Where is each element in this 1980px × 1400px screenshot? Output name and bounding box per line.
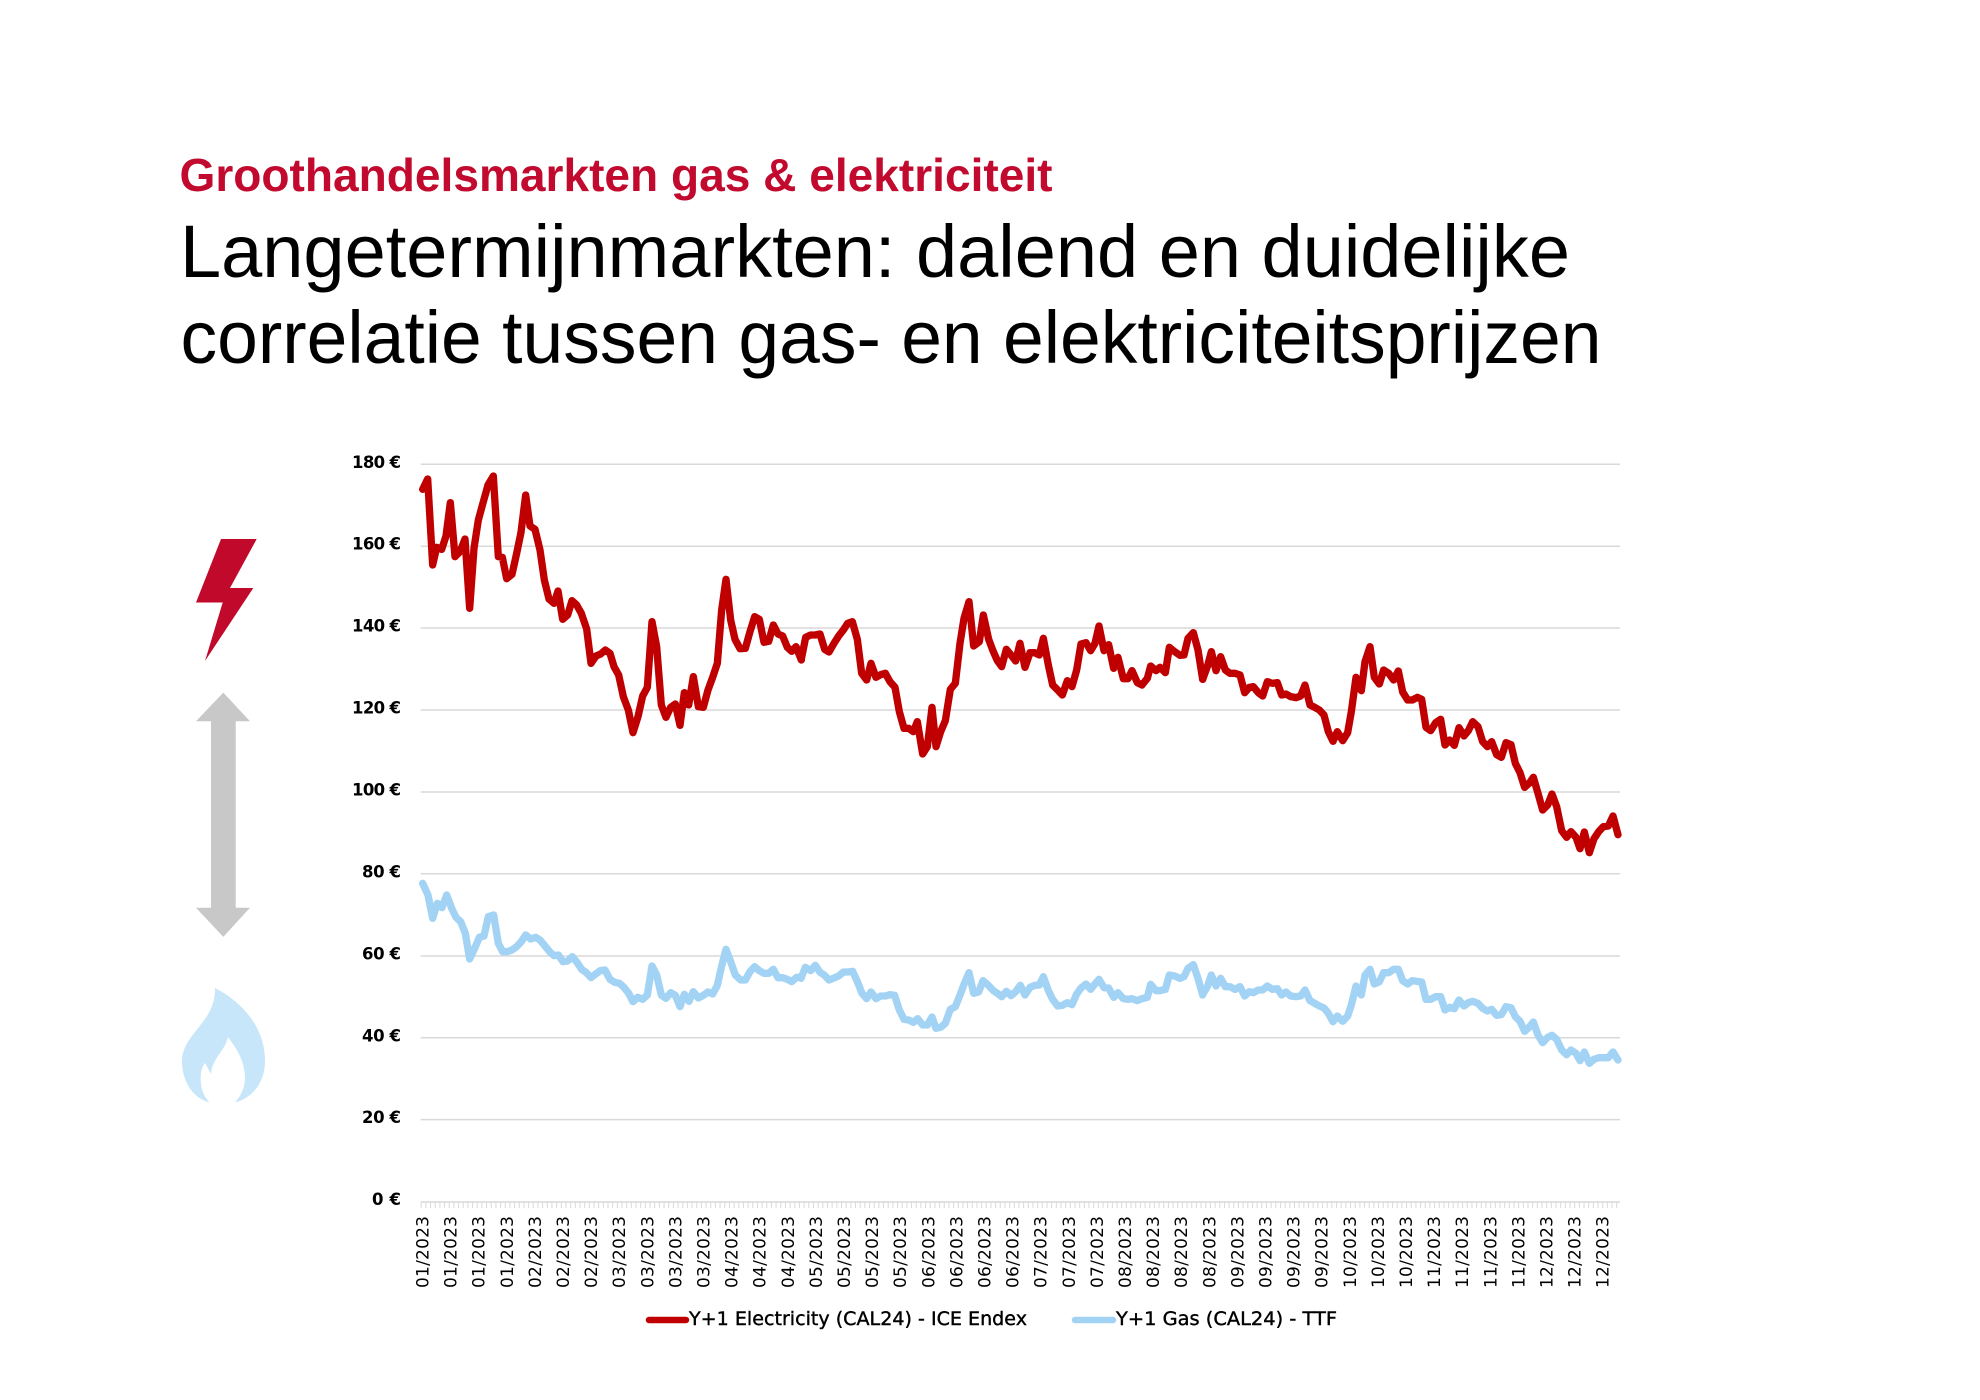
x axis date labels: 03/2023 — [610, 1216, 630, 1288]
x axis date labels: 07/2023 — [1060, 1216, 1080, 1288]
legend: gas: Y+1 Gas (CAL24) - TTF — [1115, 1308, 1337, 1330]
gridlines — [421, 464, 1620, 1205]
x axis date labels: 12/2023 — [1538, 1216, 1558, 1288]
x axis date labels: 09/2023 — [1285, 1216, 1305, 1288]
x axis date labels: 03/2023 — [638, 1216, 658, 1288]
x axis date labels: 04/2023 — [751, 1216, 771, 1288]
y axis labels: 160 € — [352, 534, 401, 554]
x axis date labels: 04/2023 — [779, 1216, 799, 1288]
title block — [180, 149, 1602, 379]
y axis labels: 100 € — [352, 780, 401, 800]
x axis date labels: 02/2023 — [526, 1216, 546, 1288]
legend — [649, 1308, 1337, 1330]
x axis date labels: 12/2023 — [1594, 1216, 1614, 1288]
x axis date labels: 11/2023 — [1481, 1216, 1501, 1288]
gas price line — [423, 883, 1618, 1063]
x axis date labels: 08/2023 — [1116, 1216, 1136, 1288]
x axis date labels: 04/2023 — [723, 1216, 743, 1288]
y axis labels: 40 € — [362, 1026, 401, 1046]
x axis date labels: 12/2023 — [1566, 1216, 1586, 1288]
main title — [180, 210, 1602, 379]
x axis date labels: 03/2023 — [694, 1216, 714, 1288]
y axis labels: 20 € — [362, 1108, 401, 1127]
x axis date labels — [414, 1216, 1614, 1288]
section heading: Groothandelsmarkten gas & elektriciteit — [180, 149, 1052, 201]
y axis labels: 80 € — [362, 862, 401, 882]
x axis date labels: 01/2023 — [498, 1216, 518, 1288]
icon: double-headed arrow — [196, 693, 250, 937]
y axis labels: 120 € — [352, 698, 401, 718]
x axis date labels: 10/2023 — [1397, 1216, 1417, 1288]
x axis date labels: 07/2023 — [1088, 1216, 1108, 1288]
x axis date labels: 06/2023 — [947, 1216, 967, 1288]
legend: electricity: Y+1 Electricity (CAL24) - ICE Endex — [688, 1308, 1027, 1330]
icon: gas flame — [182, 988, 265, 1102]
x axis date labels: 06/2023 — [919, 1216, 939, 1288]
x axis date labels: 05/2023 — [863, 1216, 883, 1288]
y axis labels: 180 € — [352, 453, 401, 472]
x axis date labels: 10/2023 — [1369, 1216, 1389, 1288]
x axis date labels: 11/2023 — [1425, 1216, 1445, 1288]
line chart — [352, 453, 1620, 1330]
electricity price line — [423, 476, 1618, 853]
x axis date labels: 02/2023 — [582, 1216, 602, 1288]
x axis date labels: 08/2023 — [1200, 1216, 1220, 1288]
x axis date labels: 08/2023 — [1144, 1216, 1164, 1288]
x axis date labels: 09/2023 — [1256, 1216, 1276, 1288]
x axis date labels: 06/2023 — [1004, 1216, 1024, 1288]
x axis date labels: 09/2023 — [1228, 1216, 1248, 1288]
x axis date labels: 02/2023 — [554, 1216, 574, 1288]
x axis date labels: 11/2023 — [1453, 1216, 1473, 1288]
x axis date labels: 01/2023 — [470, 1216, 490, 1288]
x axis date labels: 05/2023 — [835, 1216, 855, 1288]
x axis date labels: 05/2023 — [807, 1216, 827, 1288]
y axis labels — [352, 453, 401, 1209]
x axis date labels: 06/2023 — [976, 1216, 996, 1288]
x axis date labels: 08/2023 — [1172, 1216, 1192, 1288]
x axis date labels: 10/2023 — [1341, 1216, 1361, 1288]
x axis date labels: 05/2023 — [891, 1216, 911, 1288]
icon: lightning bolt — [196, 539, 257, 661]
y axis labels: 140 € — [352, 616, 401, 636]
x axis date labels: 11/2023 — [1509, 1216, 1529, 1288]
x axis date labels: 07/2023 — [1032, 1216, 1052, 1288]
x axis date labels: 03/2023 — [666, 1216, 686, 1288]
y axis labels: 60 € — [362, 944, 401, 964]
x axis date labels: 01/2023 — [414, 1216, 434, 1288]
x axis date labels: 01/2023 — [442, 1216, 462, 1288]
main title: Langetermijnmarkten: dalend en duidelijke — [180, 210, 1570, 293]
x axis date labels: 09/2023 — [1313, 1216, 1333, 1288]
y axis labels: 0 € — [372, 1190, 401, 1209]
main title: correlatie tussen gas- en elektriciteitsprijzen — [180, 296, 1602, 379]
